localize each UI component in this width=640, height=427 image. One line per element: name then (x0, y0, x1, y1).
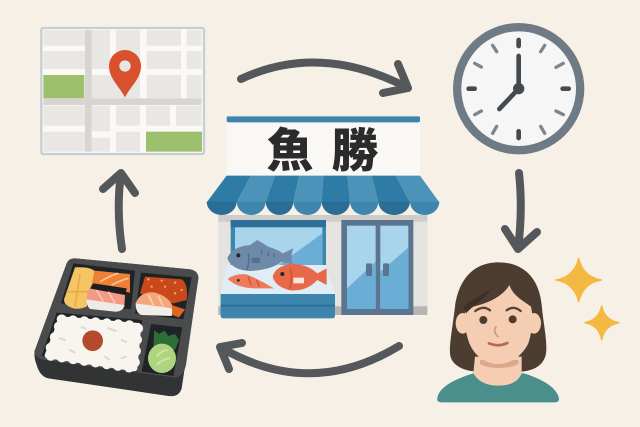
food: nigiri (136, 292, 185, 317)
icon: location pin (109, 50, 141, 97)
shop: 魚勝 fish store (207, 116, 439, 318)
icon: smiling person (437, 262, 559, 402)
food: tamago (64, 267, 95, 309)
awning (207, 176, 439, 215)
fish: grey (227, 240, 293, 271)
fish: small red (228, 274, 274, 288)
arrow: bento to map (103, 173, 135, 249)
icon: small sparkle (585, 306, 619, 340)
icon: map with location pin (41, 28, 204, 154)
icon: bento box (34, 258, 198, 396)
sign board (227, 116, 420, 177)
food: salmon roe (140, 277, 187, 303)
fish: red (273, 264, 327, 290)
compartments (42, 263, 192, 376)
food: pickle (148, 330, 179, 373)
arrow: clock to person (505, 173, 537, 249)
food: rice with umeboshi (48, 319, 138, 368)
arrow: person to bento (220, 343, 399, 373)
food: salmon sushi (87, 271, 130, 312)
arrow: map to clock (241, 63, 408, 93)
glass door (341, 220, 413, 315)
icon: clock (453, 23, 584, 154)
display window (221, 220, 335, 318)
icon: large sparkle (556, 258, 601, 302)
shop name: 魚 (267, 125, 313, 177)
sign board: 勝 (332, 125, 379, 177)
